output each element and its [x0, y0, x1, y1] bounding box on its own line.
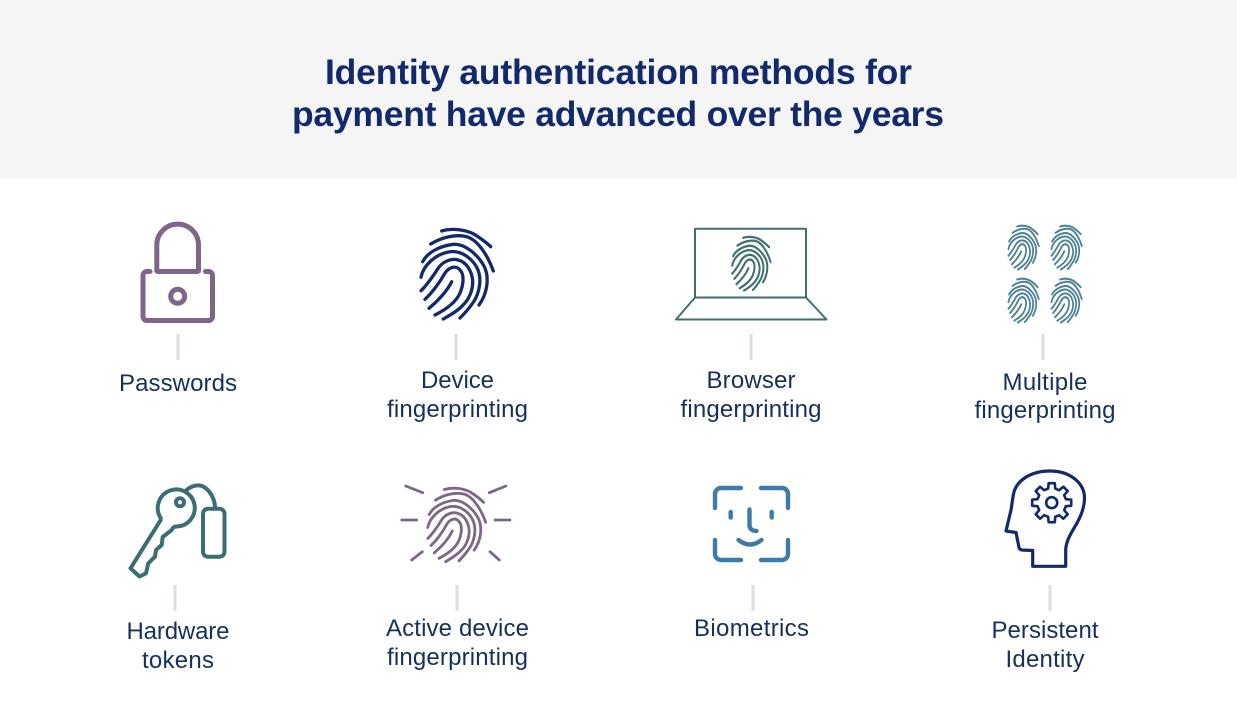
label: Device: [421, 367, 494, 394]
label: Biometrics: [694, 615, 809, 642]
icon: four fingerprints: [1008, 226, 1082, 323]
icon: head with gear: [1006, 471, 1084, 566]
item: hardware tokens: [126, 485, 230, 674]
item: biometrics: [694, 488, 809, 642]
item: browser fingerprinting: [676, 229, 826, 423]
label: fingerprinting: [974, 397, 1116, 424]
label: Hardware: [126, 618, 230, 645]
label: fingerprinting: [387, 396, 528, 423]
label: Multiple: [1002, 369, 1088, 396]
icon: fingerprint with rays: [402, 486, 510, 562]
label: Identity: [1006, 646, 1084, 673]
label: Browser: [706, 367, 796, 394]
item: persistent identity: [992, 471, 1099, 673]
label: Active device: [386, 615, 529, 642]
item: active device fingerprinting: [386, 486, 529, 671]
icon: fingerprint: [421, 229, 493, 319]
label: tokens: [142, 647, 214, 674]
label: Persistent: [992, 617, 1099, 644]
icon: laptop with fingerprint: [676, 229, 826, 320]
title: payment have advanced over the years: [292, 94, 944, 134]
label: Passwords: [119, 370, 237, 397]
icon: face scan: [715, 488, 788, 560]
label: fingerprinting: [387, 644, 528, 671]
title: [292, 52, 944, 134]
item: passwords: [119, 224, 237, 397]
icon: key with fob: [130, 485, 224, 576]
label: fingerprinting: [680, 396, 822, 423]
title: Identity authentication methods for: [325, 52, 912, 92]
header band: [0, 0, 1237, 178]
icon: padlock: [143, 224, 213, 321]
item: multiple fingerprinting: [974, 226, 1116, 424]
item: device fingerprinting: [387, 229, 528, 423]
